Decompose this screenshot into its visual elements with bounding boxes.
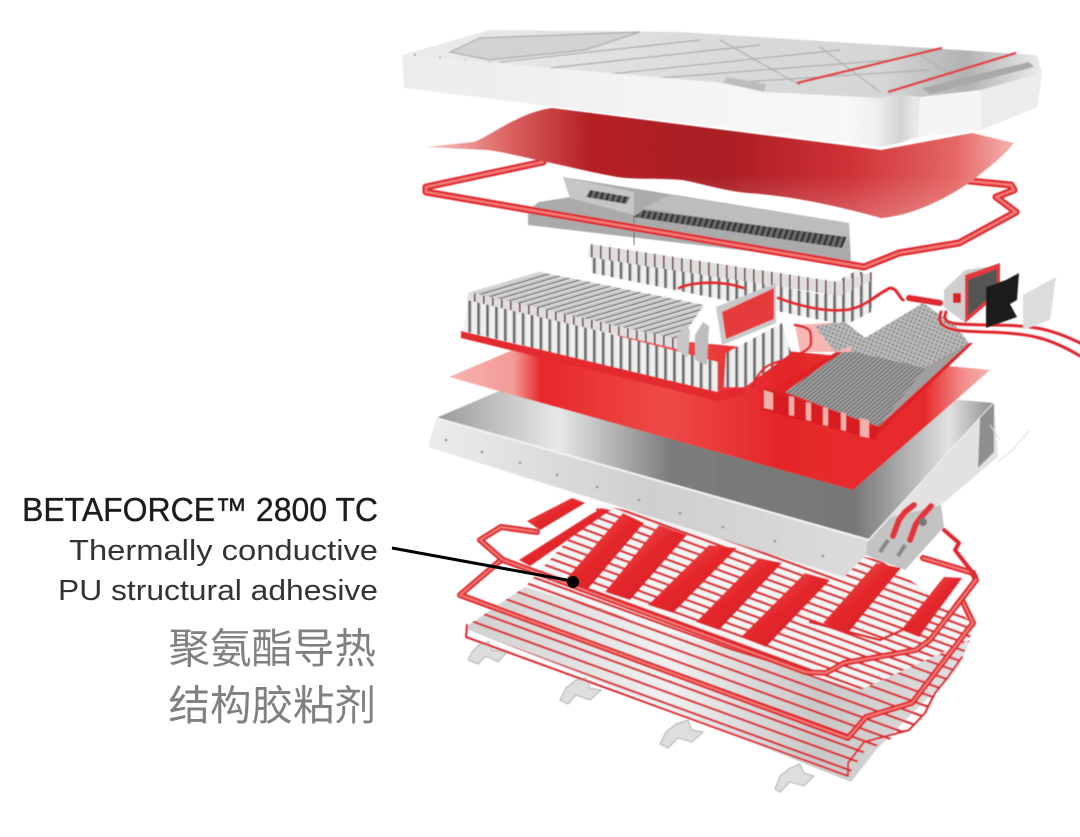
top lid — [402, 30, 1042, 147]
red end cap with tabs — [762, 388, 880, 440]
top red ring gasket — [426, 162, 1016, 267]
controller box — [944, 263, 1056, 330]
lid raised panel — [450, 32, 640, 60]
english description line 2: PU structural adhesive — [58, 575, 378, 607]
red hoses — [893, 505, 931, 540]
black electronics — [986, 273, 1019, 328]
tray corner bracket — [866, 505, 944, 570]
right cooling module — [762, 303, 973, 440]
lid red stripes — [797, 48, 942, 83]
lid tab slot — [922, 62, 1034, 94]
red connector plate — [716, 283, 776, 345]
mesh surface — [845, 303, 969, 368]
mesh connector — [815, 322, 868, 352]
grey busbar cover — [528, 177, 851, 263]
product name: BETAFORCE™ 2800 TC — [22, 491, 378, 528]
lid panel lines — [500, 40, 960, 92]
ribbed surface — [785, 350, 925, 427]
wires — [679, 283, 1080, 387]
lid rivets — [414, 54, 691, 83]
upper ring channel — [480, 527, 976, 673]
english description line 1: Thermally conductive — [69, 535, 378, 567]
tray floor — [436, 365, 994, 540]
red adhesive pad — [449, 330, 990, 490]
chinese description line 2: 结构胶粘剂 — [168, 682, 376, 729]
lid tab side face — [981, 73, 1042, 130]
front battery stack — [461, 272, 791, 401]
connector blocks — [677, 325, 690, 358]
red cooling ribs — [519, 498, 962, 647]
tray rim — [436, 403, 994, 540]
tray rivets — [445, 439, 824, 557]
red base — [762, 343, 973, 438]
rear stack top row — [588, 244, 872, 296]
tray flange and front wall — [428, 418, 869, 577]
callout text — [22, 491, 378, 729]
callout leader line — [392, 548, 579, 588]
battery pack exploded view — [402, 30, 1080, 792]
rear stack end cap — [824, 270, 871, 325]
lid tab front face — [918, 90, 981, 137]
thin white wire — [990, 425, 1030, 462]
end cap fins — [724, 323, 791, 387]
pale gap behind stacks — [795, 322, 852, 352]
lid front face — [402, 55, 1042, 147]
strip end caps — [466, 625, 848, 776]
ladder slats — [525, 505, 972, 690]
lid top face — [402, 30, 1042, 98]
rear stack front fins — [590, 250, 872, 325]
front stack red base — [461, 331, 745, 401]
outgoing cables — [940, 312, 1080, 356]
mounting brackets — [468, 642, 814, 792]
rear battery stack — [588, 244, 872, 352]
grey shield panel — [1023, 277, 1056, 330]
lower cooling plate with strips — [460, 498, 976, 792]
metal tray — [428, 365, 1030, 577]
comb strip — [634, 210, 847, 248]
front stack fins — [463, 297, 718, 392]
lower strips — [464, 587, 970, 776]
chinese description line 1: 聚氨酯导热 — [168, 625, 376, 672]
wavy red thermal sheet — [426, 108, 1014, 218]
mid wires — [679, 283, 743, 288]
tray right wall — [867, 403, 998, 543]
front stack top cells — [469, 272, 704, 340]
lower ring channel — [460, 560, 973, 738]
silver base plate — [464, 587, 970, 782]
front edge tile row — [467, 292, 682, 350]
